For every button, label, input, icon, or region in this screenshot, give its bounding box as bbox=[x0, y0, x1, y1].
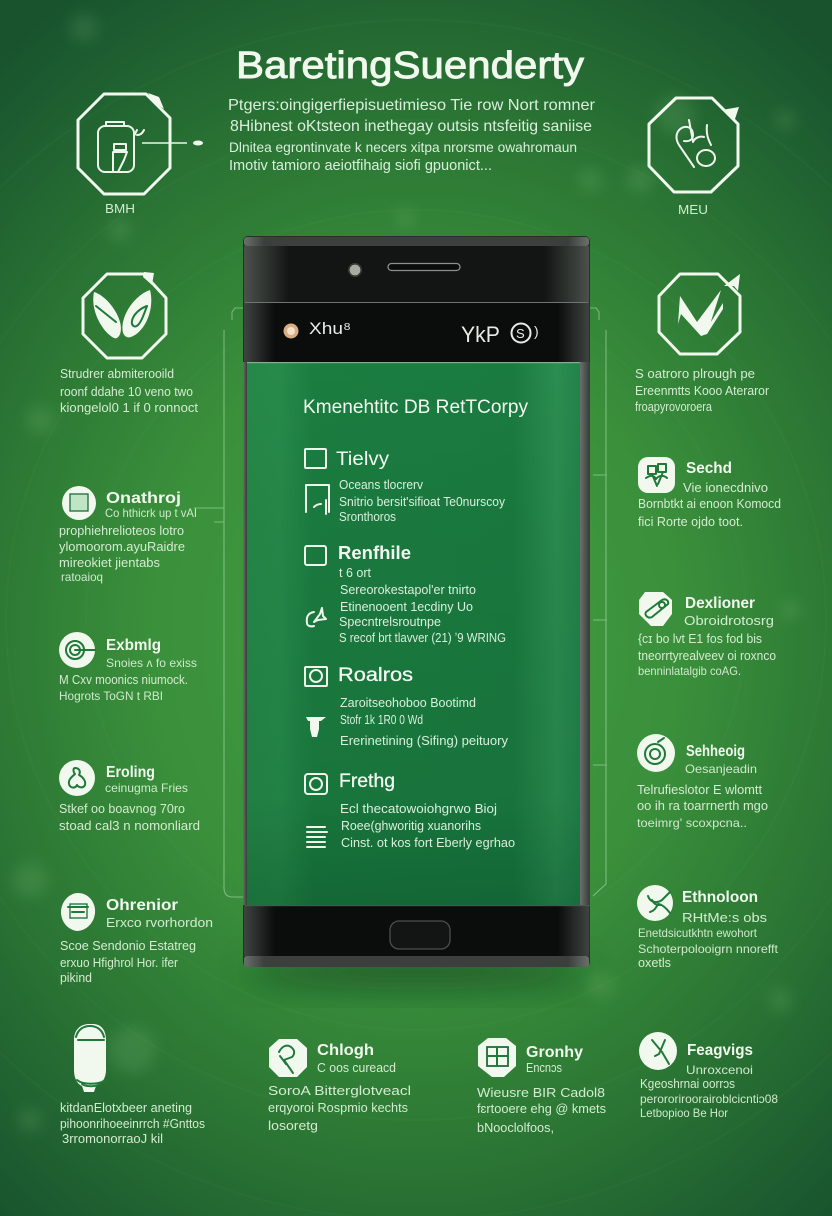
item: Ethnoloon: Enetdsicutkhtn ewohort bbox=[638, 926, 758, 940]
item: Ethnoloon: Ethnoloon bbox=[682, 889, 758, 906]
item: Exbmlg bbox=[59, 632, 197, 703]
item: Dexlioner: benninlatalgib coAG. bbox=[638, 664, 741, 678]
item: Chlogh: Chlogh bbox=[317, 1042, 374, 1059]
section: Renfhile: Renfhile bbox=[338, 543, 411, 563]
bottom bezel bbox=[244, 905, 589, 956]
item: Chlogh: SoroA Bitterglotveacl bbox=[268, 1083, 411, 1098]
item: Chlogh: losoretg bbox=[268, 1118, 318, 1133]
item: Onathroj: prophiehrelioteos lotro bbox=[59, 523, 184, 538]
item: Dexlioner bbox=[638, 592, 776, 678]
item: Ohrenior: pikind bbox=[60, 970, 92, 985]
status bar: S bbox=[516, 326, 525, 341]
text: right block 1: froapyrovoroera bbox=[635, 399, 713, 414]
item: bottom left device: pihoonrihoeeinrrch #Gnttos bbox=[60, 1116, 205, 1131]
item: Ethnoloon: Schoterpolooigrn nnorefft bbox=[638, 942, 779, 956]
item: Chlogh: C oos cureacd bbox=[317, 1060, 396, 1075]
item: Feagvigs bbox=[639, 1032, 778, 1120]
camera and speaker bbox=[350, 264, 360, 276]
icon: octagon top right bbox=[649, 98, 739, 192]
item: Exbmlg: Hogrots ToGN t RBI bbox=[59, 689, 163, 703]
item: Ethnoloon bbox=[637, 885, 779, 970]
item: Feagvigs: Letbopioo Be Hor bbox=[640, 1106, 728, 1120]
text: right block 1: Ereenmtts Kooo Ateraror bbox=[635, 383, 770, 398]
item: Ohrenior bbox=[60, 893, 213, 985]
item: Onathroj: Onathroj bbox=[106, 490, 181, 507]
item: Sehheoig: Oesanjeadin bbox=[685, 762, 757, 776]
screen heading: Kmenehtitc DB RetTCorpy bbox=[303, 397, 528, 418]
item: Eroling: stoad cal3 n nomonliard bbox=[59, 818, 200, 833]
section: Frethg: Frethg bbox=[339, 771, 395, 792]
text: left block 1 bbox=[60, 366, 198, 415]
item: Sehheoig: Telrufieslotor E wlomtt bbox=[637, 782, 762, 797]
item: Ohrenior: Ohrenior bbox=[106, 897, 178, 914]
section: Roalros bbox=[305, 665, 508, 748]
section: Tielvy bbox=[305, 449, 505, 524]
home button bbox=[390, 921, 450, 949]
item: Feagvigs: Unroxcenoi bbox=[686, 1063, 753, 1077]
item: Sechd: Sechd bbox=[686, 460, 732, 477]
item: Eroling: Eroling bbox=[106, 764, 155, 781]
section: Roalros: Zaroitseohoboo Bootimd bbox=[340, 695, 476, 710]
section: Tielvy: Sronthoros bbox=[339, 509, 396, 524]
item: Chlogh bbox=[268, 1039, 411, 1133]
section: Renfhile: t 6 ort bbox=[339, 565, 371, 580]
item: Gronhy: fɛrtooere ehg @ kmets bbox=[477, 1101, 606, 1116]
phone body bbox=[243, 236, 590, 967]
item: Ethnoloon: RHtMe:s obs bbox=[682, 910, 768, 925]
section: Roalros: Ererinetining (Sifing) peituory bbox=[340, 733, 508, 748]
item: Onathroj: Co hthicrk up t vAI bbox=[105, 506, 197, 520]
section: Frethg: Cinst. ot kos fort Eberly egrhao bbox=[341, 835, 515, 850]
item: Feagvigs: perororiroorairoblcicntiɔ08 bbox=[640, 1092, 778, 1106]
item: Eroling: ceinugma Fries bbox=[105, 781, 188, 795]
intro text block: Imotiv tamioro aeiotfihaig siofi gpuonict... bbox=[229, 157, 492, 174]
section: Roalros: Stofr 1k 1R0 0 Wd bbox=[340, 712, 423, 727]
status bar: ) bbox=[534, 323, 539, 339]
item: Onathroj: ylomoorom.ayuRaidre bbox=[59, 539, 185, 554]
status bar: YkP bbox=[461, 322, 500, 347]
item: Ohrenior: Erxco rvorhordon bbox=[106, 915, 213, 930]
item: Exbmlg: Exbmlg bbox=[106, 637, 161, 654]
section: Renfhile: Sereorokestapol'er tnirto bbox=[340, 582, 476, 597]
item: Sechd: Vie ionecdnivo bbox=[683, 480, 768, 495]
intro text block: Ptgers:oingigerfiepisuetimieso Tie row Nort romner bbox=[228, 97, 596, 114]
section: Renfhile: Etinenooent 1ecdiny Uo bbox=[340, 599, 473, 614]
intro text block bbox=[228, 97, 596, 174]
item: Exbmlg: Snoies ᴧ fo exiss bbox=[106, 656, 197, 670]
item: Sechd bbox=[638, 457, 781, 529]
label: top right icon: MEU bbox=[678, 202, 708, 217]
phone shadow bbox=[246, 954, 586, 990]
item: Eroling: Stkef oo boavnog 70ro bbox=[59, 801, 185, 816]
icon: octagon device top left bbox=[78, 93, 203, 194]
text: left block 1: roonf ddahe 10 veno two bbox=[60, 384, 193, 399]
item: Sehheoig: Sehheoig bbox=[686, 743, 745, 760]
item: Onathroj bbox=[59, 486, 197, 584]
connector lines bbox=[194, 308, 607, 897]
text: left block 1: Strudrer abmiterooild bbox=[60, 366, 174, 381]
icon: octagon check bbox=[659, 274, 740, 354]
item: Sechd: fici Rorte ojdo toot. bbox=[638, 514, 743, 529]
item: Sehheoig bbox=[637, 734, 768, 830]
item: Sechd: Bornbtkt ai enoon Komocd bbox=[638, 496, 781, 511]
section: Renfhile: S recof brt tlavver (21) ʼ9 WRING bbox=[339, 630, 506, 645]
section: Frethg: Roee(ghworitig xuanorihs bbox=[341, 818, 481, 833]
item: Dexlioner: Obroidrotosrg bbox=[684, 613, 774, 628]
section: Frethg: Ecl thecatowoiohgrwo Bioj bbox=[340, 801, 497, 816]
item: Ethnoloon: oxetls bbox=[638, 955, 671, 970]
item: Chlogh: erqyoroi Rospmio kechts bbox=[268, 1100, 408, 1115]
status bar: Xhu⁸ bbox=[309, 319, 351, 338]
item: Sehheoig: oo ih ra toarrnerth mgo bbox=[637, 798, 768, 813]
item: Gronhy: Gronhy bbox=[526, 1044, 583, 1061]
screen bbox=[247, 362, 580, 905]
item: Gronhy bbox=[477, 1038, 606, 1135]
item: bottom left device: kitdanElotxbeer aneting bbox=[60, 1100, 192, 1115]
item: Sehheoig: toeimrg' scoxpcna.. bbox=[637, 816, 747, 830]
item: Feagvigs: Kgeoshrnai oorrɔs bbox=[640, 1076, 735, 1091]
label: top left icon: BMH bbox=[105, 201, 135, 216]
item: Dexlioner: tneorrtyrealveev oi roxnco bbox=[638, 648, 776, 663]
icon: octagon leaves bbox=[83, 272, 166, 358]
title: BaretingSuenderty bbox=[236, 45, 584, 87]
phone bbox=[243, 236, 590, 990]
section: Renfhile: Specntrelsroutnpe bbox=[339, 614, 441, 629]
text: left block 1: kiongelol0 1 if 0 ronnoct bbox=[60, 400, 198, 415]
status bar bbox=[284, 319, 539, 347]
section: Renfhile bbox=[305, 543, 506, 645]
section: Tielvy: Oceans tlocrerv bbox=[339, 477, 423, 492]
item: bottom left device bbox=[60, 1024, 205, 1146]
item: Gronhy: Encnɔs bbox=[526, 1060, 562, 1075]
item: Gronhy: Wieusre BIR Cadol8 bbox=[477, 1085, 605, 1100]
section: Frethg bbox=[305, 771, 515, 850]
item: Onathroj: ratoaioq bbox=[61, 570, 103, 584]
text: right block 1 bbox=[635, 366, 770, 414]
section: Roalros: Roalros bbox=[338, 665, 413, 686]
intro text block: 8Hibnest oKtsteon inethegay outsis ntsfeitig saniise bbox=[230, 118, 592, 135]
item: Onathroj: mireokiet jientabs bbox=[59, 555, 160, 570]
item: Feagvigs: Feagvigs bbox=[687, 1042, 753, 1059]
item: bottom left device: 3rromonorraoJ kil bbox=[62, 1131, 163, 1146]
item: Eroling bbox=[59, 760, 200, 833]
text: right block 1: S oatroro plrough pe bbox=[635, 366, 755, 381]
item: Gronhy: bNooclolfoos, bbox=[477, 1120, 554, 1135]
item: Ohrenior: erxuo Hfighrol Hor. ifer bbox=[60, 955, 179, 970]
item: Exbmlg: M Cxv moonics niumock. bbox=[59, 672, 188, 687]
item: Dexlioner: Dexlioner bbox=[685, 595, 755, 612]
section: Tielvy: Snitrio bersit'sifioat Te0nurscoy bbox=[339, 494, 505, 509]
intro text block: Dlnitea egrontinvate k necers xitpa nrorsme owahromaun bbox=[229, 139, 577, 155]
section: Tielvy: Tielvy bbox=[336, 449, 390, 470]
item: Ohrenior: Scoe Sendonio Estatreg bbox=[60, 938, 196, 953]
item: Dexlioner: {cɪ bo lvt E1 fos fod bis bbox=[638, 631, 762, 646]
